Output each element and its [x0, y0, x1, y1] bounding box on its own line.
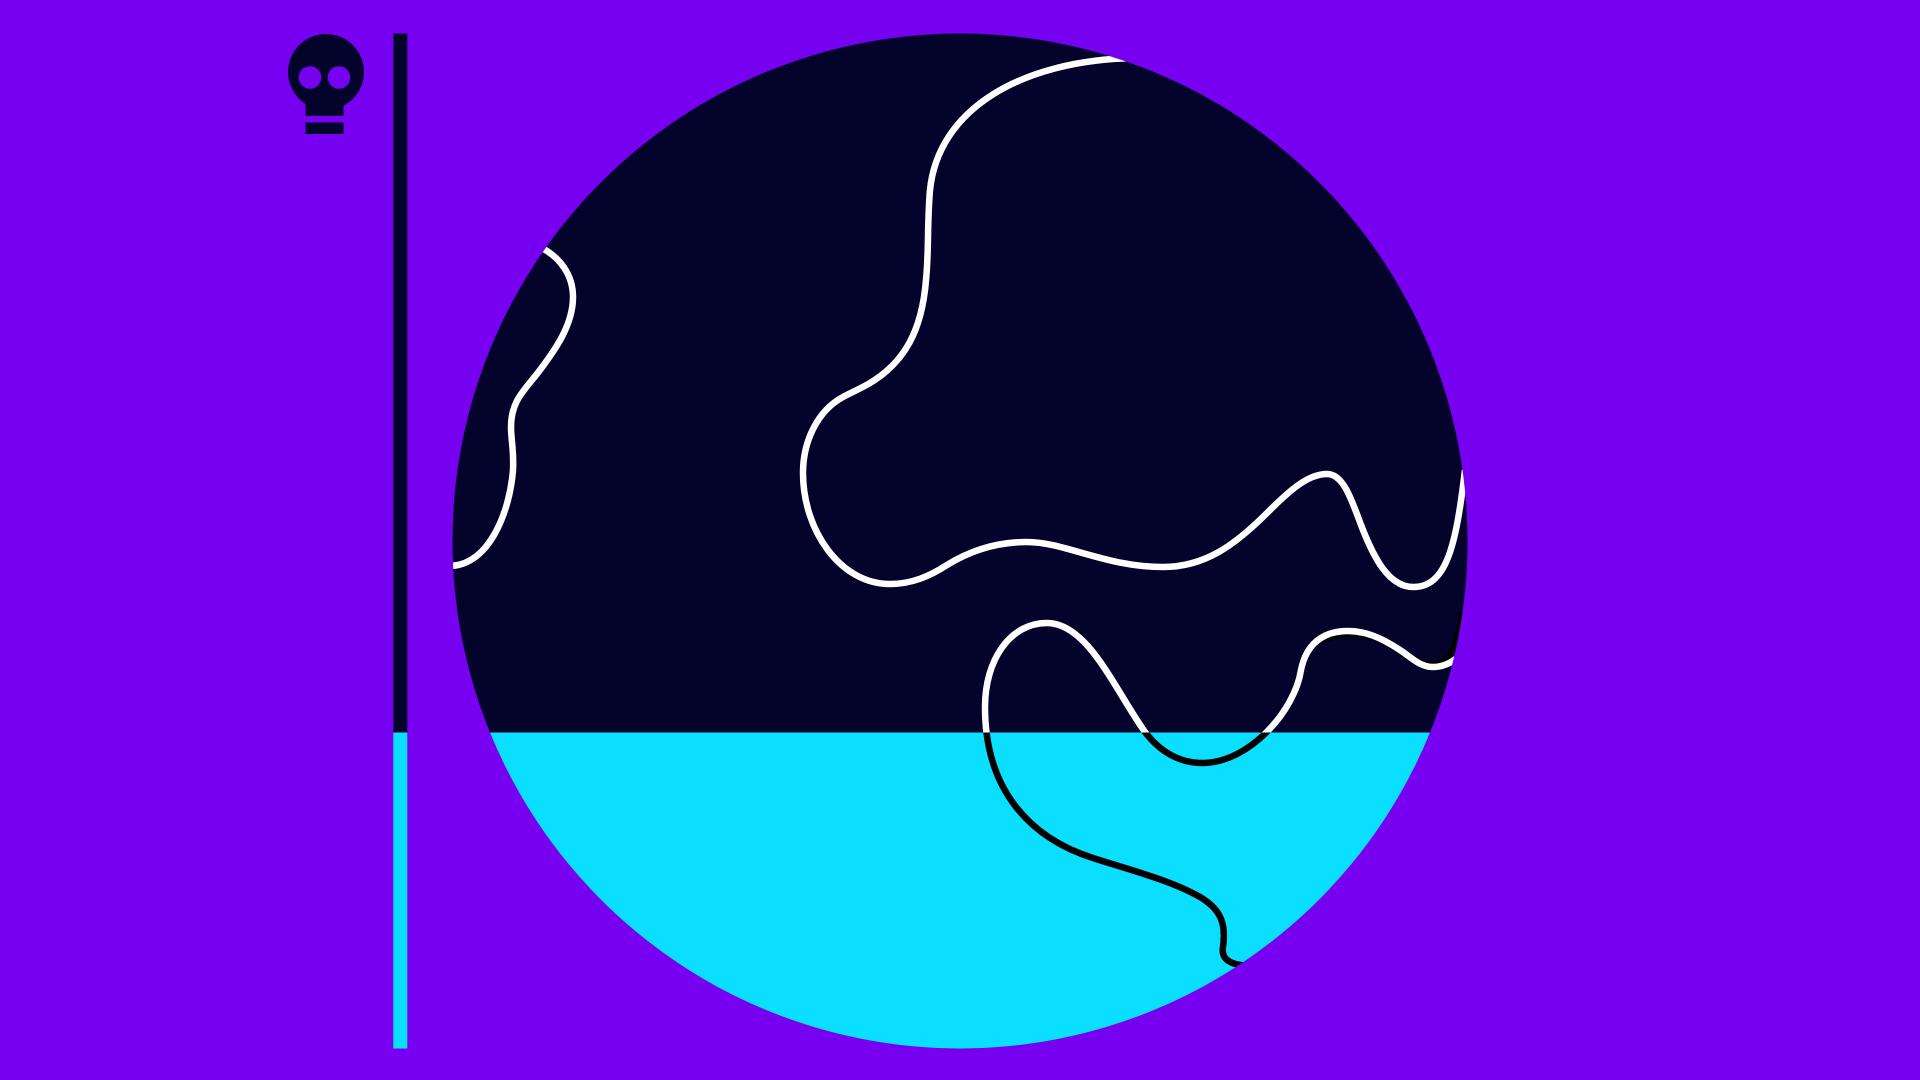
continent outline in black over the cyan section [983, 732, 1271, 968]
continent outlines in white over the dark section [453, 56, 1466, 732]
globe circle [450, 30, 1470, 1052]
globe: cyan lower section [450, 732, 1470, 1052]
globe: dark upper section [450, 30, 1470, 732]
vertical gauge bar [393, 34, 407, 1048]
black shadow line behind white outline [1050, 612, 1462, 670]
icon: skull [288, 34, 364, 134]
